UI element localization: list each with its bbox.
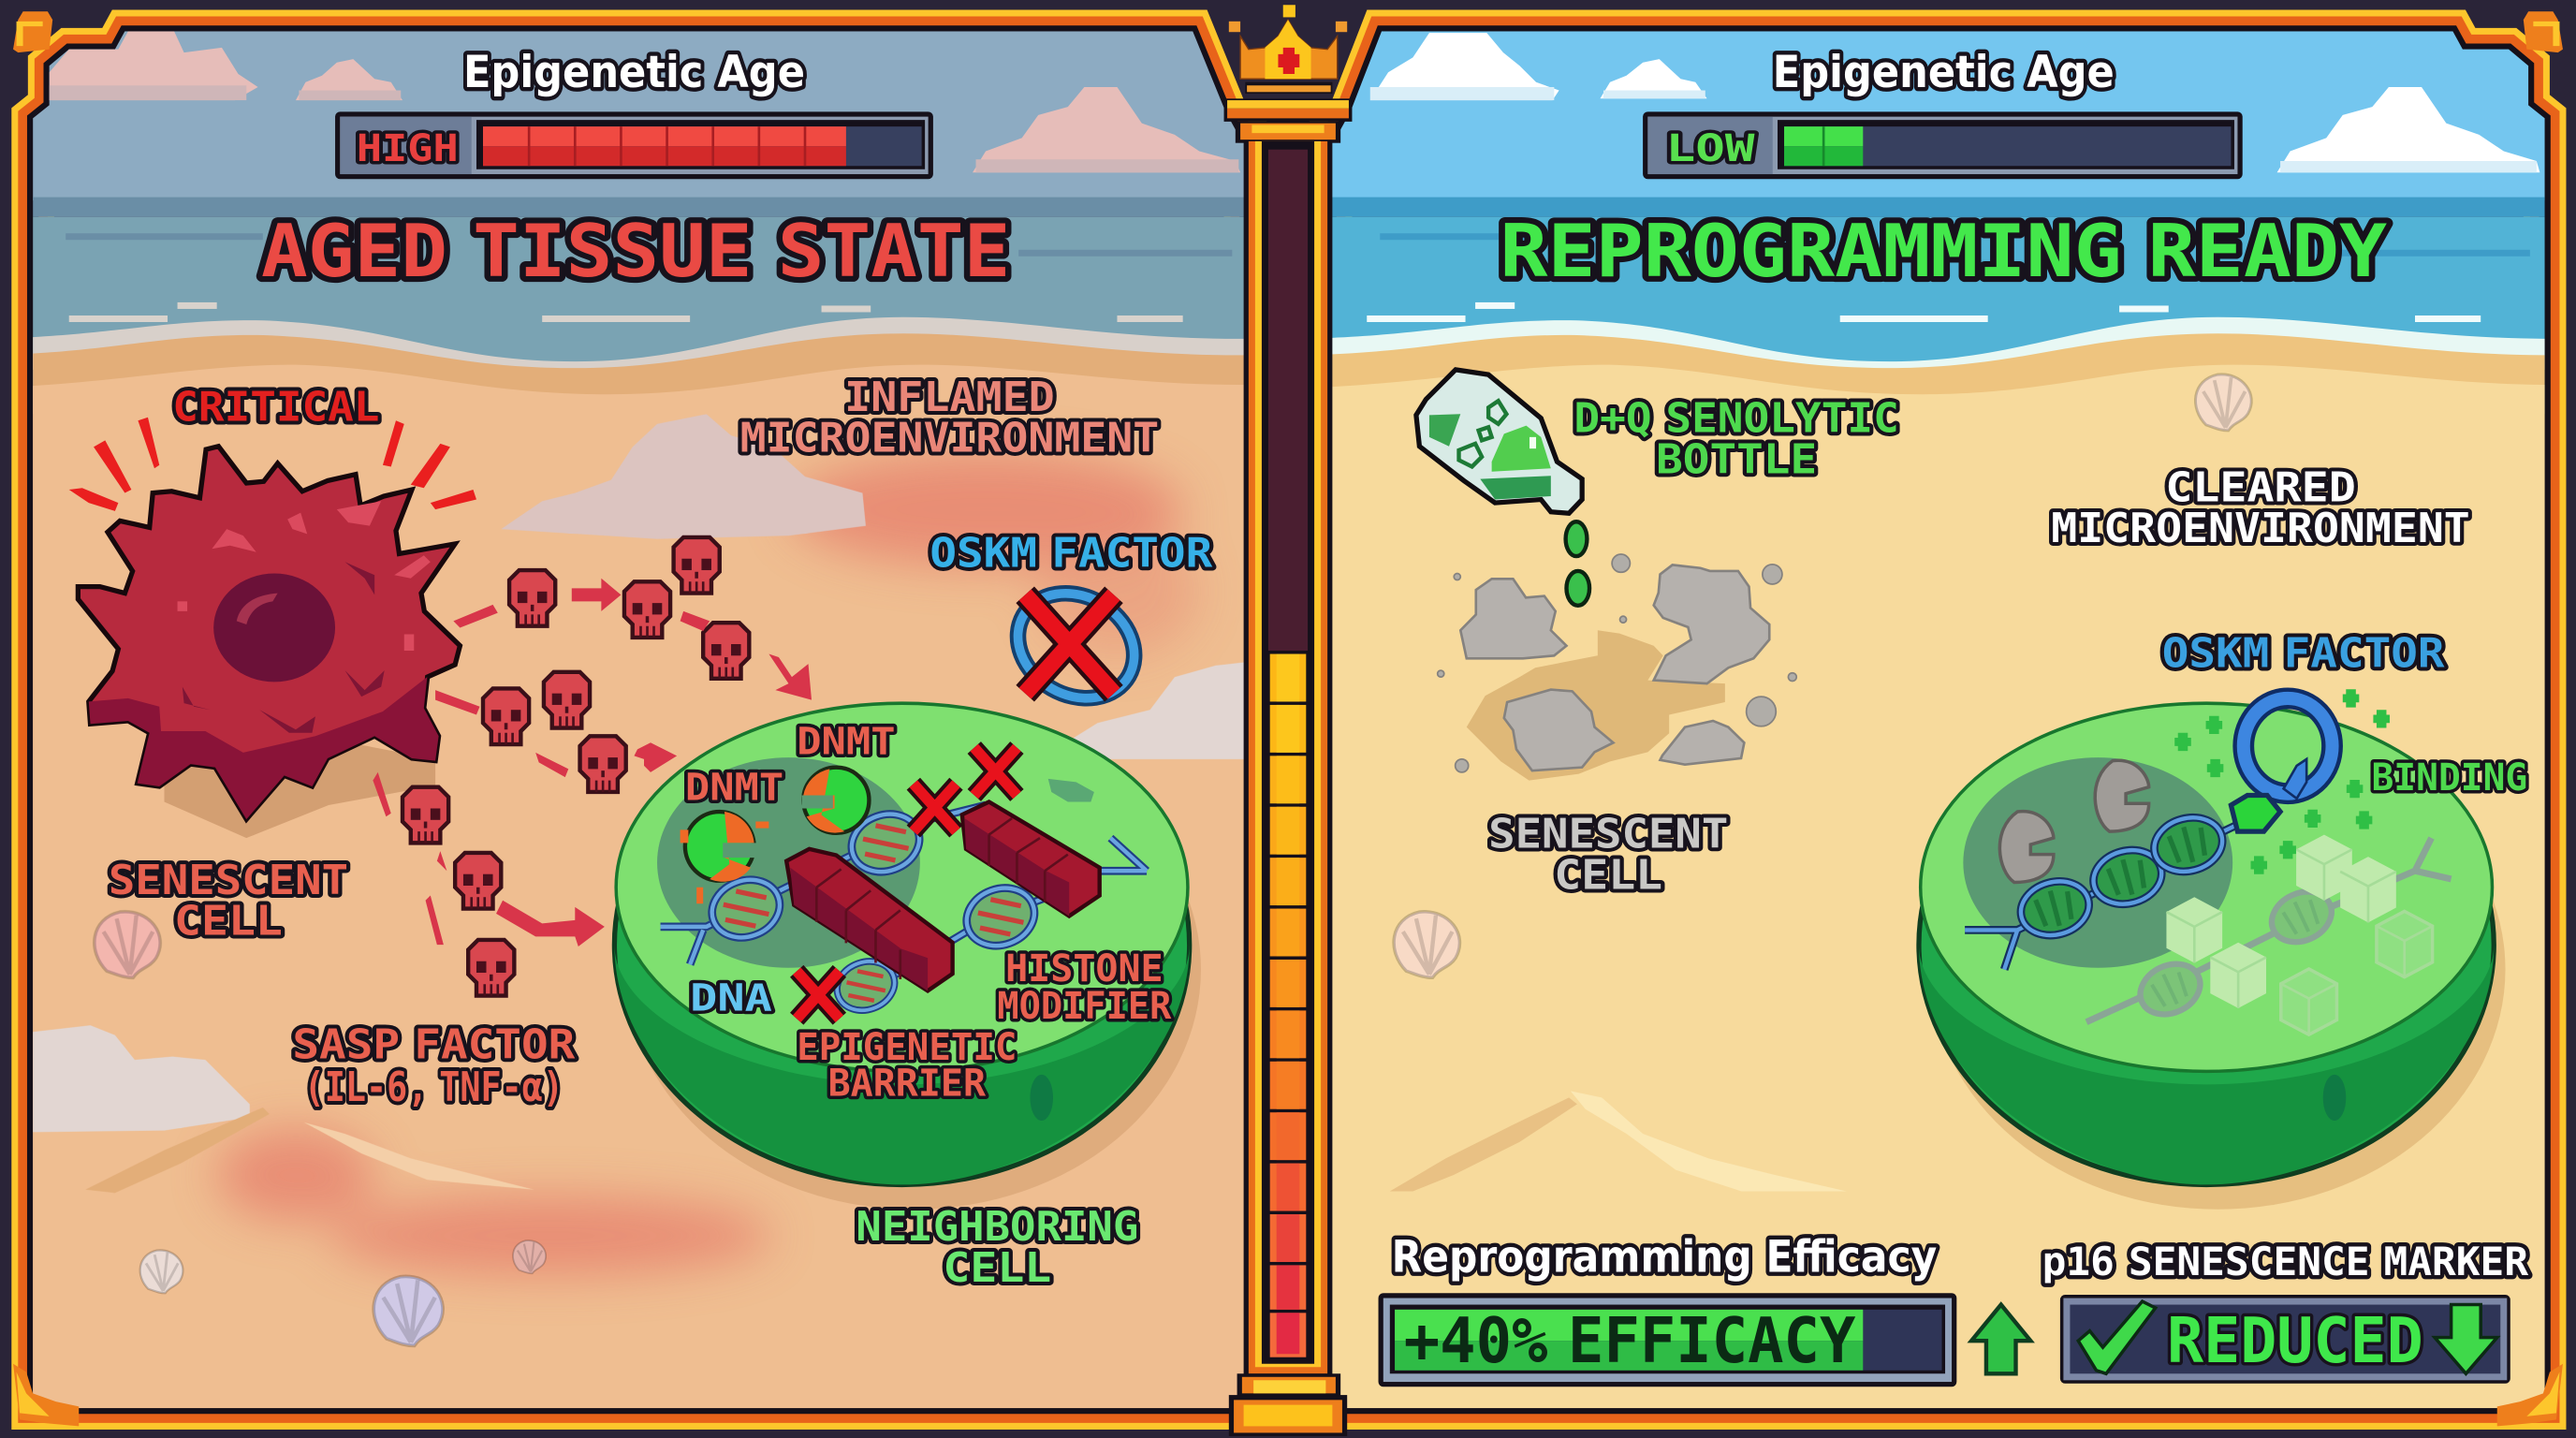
- label: senescent cell: [109, 857, 348, 946]
- meter: efficacy: [1379, 1293, 1956, 1387]
- active DNA helix: [1965, 810, 2250, 970]
- pillar: crossbar and top cap: [1224, 98, 1352, 143]
- label: neighboring cell: CELL: [943, 1244, 1051, 1292]
- meter label: LOW: [1666, 126, 1755, 170]
- panel: aged tissue background: [0, 0, 1265, 1438]
- DNMT enzyme lower: [681, 812, 768, 903]
- meter label: HIGH: [357, 126, 459, 170]
- sky clouds: [50, 31, 1240, 172]
- red crosses: [797, 748, 1017, 1019]
- OSKM ring binding: [2231, 698, 2333, 831]
- label: SASP factor: [292, 1020, 576, 1111]
- green sparkles: [2174, 689, 2390, 874]
- label: epigenetic barrier: [797, 1025, 1017, 1106]
- disc spots: [1048, 779, 1094, 801]
- foam: [0, 317, 1265, 370]
- label: epigenetic barrier: BARRIER: [828, 1062, 987, 1106]
- arrow: marker down: [2435, 1305, 2497, 1373]
- label: senescent cell cleared: CELL: [1554, 852, 1662, 900]
- panel: reprogramming ready background: [1314, 0, 2576, 1438]
- sand: [1314, 333, 2576, 1438]
- dna strands: [661, 805, 1147, 1019]
- label: D+Q senolytic bottle: BOTTLE: [1656, 435, 1817, 483]
- sand dune: [85, 1108, 270, 1193]
- arrows: SASP secretion: [373, 579, 812, 946]
- arrow: efficacy up: [1971, 1305, 2030, 1373]
- nucleus: [657, 757, 920, 968]
- icon: critical alert rays: [69, 418, 476, 511]
- shells: [95, 912, 160, 977]
- foam: [1314, 317, 2576, 370]
- debris particles: [1438, 554, 1796, 772]
- meter: high epigenetic age: [335, 111, 933, 179]
- histone block left: [786, 849, 953, 990]
- icon: neighboring cell with blocked epigenetic state: [614, 703, 1201, 1210]
- label: OSKM factor left: OSKM FACTOR: [929, 530, 1213, 578]
- label: senescent cell cleared: [1488, 811, 1728, 900]
- title: reprogramming ready: REPROGRAMMING READY: [1500, 210, 2388, 294]
- heading: right epigenetic age label: Epigenetic Age: [1773, 47, 2115, 98]
- meter segments: [483, 126, 846, 166]
- icon: crown: [1229, 5, 1347, 94]
- DNMT enzyme upper: [801, 768, 869, 833]
- label: histone modifier: HISTONE: [1005, 946, 1164, 990]
- label: inflamed microenvironment: MICROENVIRONMENT: [740, 415, 1159, 462]
- label: D+Q senolytic bottle: [1573, 395, 1899, 483]
- smoke clouds: [1460, 565, 1769, 770]
- label: SASP factor: SASP FACTOR: [292, 1020, 576, 1068]
- nucleus: [1963, 757, 2232, 968]
- label: senescent cell: CELL: [174, 898, 283, 946]
- label: SASP factor: (IL-6, TNF-α): [304, 1064, 564, 1111]
- label: senescent cell: SENESCENT: [109, 857, 348, 904]
- label: cleared microenvironment: [2051, 463, 2470, 552]
- title: aged tissue state: AGED TISSUE STATE: [261, 210, 1010, 294]
- label: p16 senescence marker: p16 SENESCENCE MARKER: [2042, 1239, 2529, 1284]
- histone block right: [962, 801, 1100, 916]
- icon: blocked OSKM ring: [999, 573, 1153, 719]
- label: cleared microenvironment: CLEARED: [2165, 463, 2356, 511]
- heading: left epigenetic age label: Epigenetic Age: [463, 47, 805, 98]
- icon: senescent cell: [63, 0, 460, 838]
- pillar: pedestal: [1229, 1373, 1347, 1436]
- drops: [1566, 521, 1587, 556]
- label: OSKM factor right: OSKM FACTOR: [2162, 630, 2445, 678]
- label: senescent cell cleared: SENESCENT: [1488, 811, 1728, 858]
- icon: check mark: [2078, 1301, 2156, 1373]
- sky clouds: [1370, 33, 2539, 172]
- label: reprogramming efficacy: Reprogramming Efficacy: [1392, 1231, 1937, 1283]
- callout: critical: CRITICAL: [172, 383, 379, 431]
- label: inflamed microenvironment: [740, 374, 1159, 462]
- efficacy value: +40% EFFICACY: [1404, 1304, 1855, 1377]
- meter segments: [1784, 126, 1863, 166]
- skulls: SASP factors: [402, 537, 749, 996]
- shells: [1394, 912, 1459, 977]
- frame: right panel border: [1331, 31, 2545, 1408]
- sand: [0, 333, 1265, 1438]
- ghost DNA and cubes: [2086, 835, 2452, 1034]
- sand dune: [1390, 1097, 1577, 1191]
- gauge segments: [1270, 654, 1306, 1357]
- label: DNMT lower: DNMT: [685, 766, 783, 810]
- icon: D+Q senolytic bottle: [1416, 370, 1589, 606]
- pillar: gauge column: [1244, 141, 1332, 1377]
- gray inactive enzymes: [1999, 760, 2149, 882]
- label: neighboring cell: [856, 1203, 1138, 1292]
- inflamed haze: [217, 452, 1199, 1275]
- label: DNA: DNA: [690, 976, 772, 1020]
- label: epigenetic barrier: EPIGENETIC: [797, 1025, 1017, 1069]
- badge: p16 reduced: [2060, 1295, 2510, 1384]
- sand clouds: [33, 414, 1245, 1132]
- frame: left panel border: [33, 31, 1245, 1408]
- label: neighboring cell: NEIGHBORING: [856, 1203, 1138, 1251]
- label: histone modifier: MODIFIER: [997, 984, 1172, 1028]
- label: cleared microenvironment: MICROENVIRONMENT: [2051, 505, 2470, 552]
- icon: cleared senescent cell debris: [1438, 554, 1796, 781]
- meter: low epigenetic age: [1643, 111, 2243, 179]
- label: histone modifier: [997, 946, 1172, 1028]
- label: D+Q senolytic bottle: D+Q SENOLYTIC: [1573, 395, 1899, 443]
- reduced value: REDUCED: [2167, 1304, 2423, 1377]
- label: inflamed microenvironment: INFLAMED: [844, 374, 1055, 421]
- label: DNMT upper: DNMT: [797, 720, 896, 764]
- label: binding: BINDING: [2371, 756, 2527, 800]
- icon: rejuvenated cell with OSKM binding: [1919, 689, 2506, 1210]
